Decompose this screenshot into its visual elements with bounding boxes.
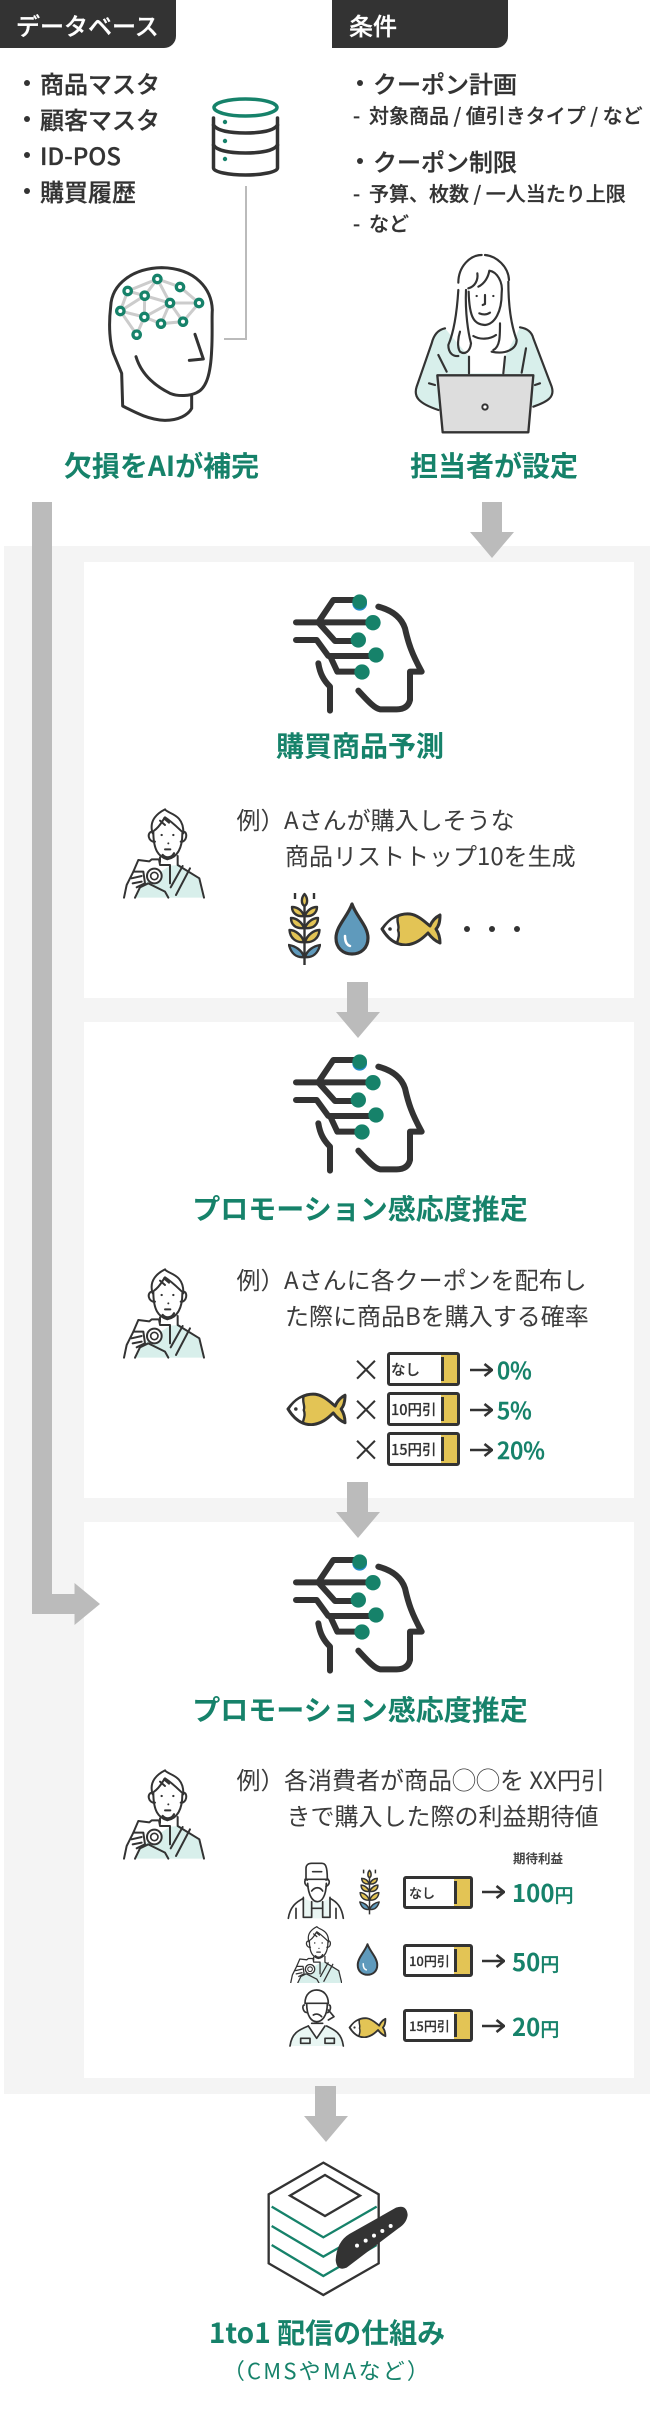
example text: きで購入した際の利益期待値 (286, 1797, 598, 1832)
icon: AI head (293, 594, 425, 714)
panel title: プロモーション感応度推定 (192, 1689, 528, 1729)
heading: 1to1 delivery system: 1to1 配信の仕組み (209, 2312, 445, 2352)
example text (236, 801, 576, 872)
icon: AI head (293, 1054, 425, 1174)
panel title: 購買商品予測 (276, 725, 444, 765)
arrow: process to delivery (304, 2086, 348, 2142)
illustration: consumers (288, 1862, 344, 2047)
example text: Aさんが購入しそうな (284, 801, 515, 836)
coupon row: 10 yen off: × (351, 1386, 381, 1430)
example text: 例） (236, 1761, 284, 1796)
coupon row: 15 yen off (351, 1426, 545, 1470)
coupon row: 15 yen off: 15円引 (391, 1438, 437, 1460)
coupon row: none (351, 1346, 532, 1390)
row: 10 yen off, 50 yen (403, 1943, 559, 1978)
coupon row: 10 yen off: 10円引 (391, 1398, 437, 1420)
icon: man with camera (123, 808, 205, 899)
connector line from database to head (224, 186, 247, 340)
example text (236, 1261, 589, 1332)
coupon row: 15 yen off: 20% (497, 1432, 545, 1466)
person: worker with cap (290, 1990, 343, 2046)
row: no coupon, 100 yen (403, 1874, 574, 1909)
row: no coupon, 100 yen: なし (409, 1883, 435, 1902)
coupon row: 10 yen off (351, 1386, 532, 1430)
icon: fish (348, 2017, 386, 2038)
example text: 例） (236, 1261, 284, 1296)
coupon row: none: なし (391, 1358, 420, 1380)
example text: 商品リストトップ10を生成 (285, 837, 576, 872)
icon: delivery cube with tag (150, 2100, 500, 2418)
list: conditions: など (369, 208, 409, 237)
panel: promotion sensitivity estimate (purchase probability) (84, 1022, 634, 1498)
list: conditions: 対象商品 / 値引きタイプ / など (369, 100, 643, 129)
heading: missing data completed by AI: 欠損をAIが補完 (64, 445, 259, 485)
heading tab: database (0, 0, 176, 48)
coupon row: none: × (351, 1346, 381, 1390)
panel title: プロモーション感応度推定 (192, 1188, 528, 1228)
label: expected profit: 期待利益 (513, 1848, 563, 1867)
icon: water drop (356, 1943, 378, 1976)
list: database items: 商品マスタ (40, 65, 160, 100)
sub item: limit details (353, 178, 626, 207)
heading tab: conditions: 条件 (349, 7, 397, 42)
row: no coupon, 100 yen: 100円 (512, 1874, 574, 1909)
list: database items (24, 65, 160, 208)
coupon row: 15 yen off: × (351, 1426, 381, 1470)
sub item: plan details (353, 100, 643, 129)
icon: wheat (288, 892, 321, 965)
example text: 各消費者が商品◯◯を XX円引 (284, 1761, 605, 1796)
ellipsis dots (464, 926, 520, 932)
row: 15 yen off, 20 yen (403, 2008, 559, 2043)
heading tab: database: データベース (16, 7, 159, 42)
heading tab: conditions (332, 0, 508, 48)
icon: woman with laptop (414, 254, 554, 434)
list: database items: 購買履歴 (40, 173, 136, 208)
list: conditions: 予算、枚数 / 一人当たり上限 (369, 178, 626, 207)
item: coupon limits: クーポン制限 (373, 143, 517, 178)
sub item: limit details: - (353, 178, 360, 207)
panel: gray process background (4, 546, 650, 2094)
sub item: plan details: - (353, 100, 360, 129)
person: older man with towel (288, 1863, 343, 1918)
example text: 例） (236, 801, 284, 836)
arrow: conditions to panel (470, 502, 514, 558)
icon: man with camera (123, 1769, 205, 1860)
list: database items: ID-POS (40, 137, 121, 172)
list: database items: 顧客マスタ (40, 101, 160, 136)
arrow: from database down and into third panel (32, 502, 100, 1625)
coupon row: 10 yen off: 5% (497, 1392, 532, 1426)
example text: Aさんに各クーポンを配布し (284, 1261, 587, 1296)
person: man with camera, small (290, 1926, 342, 1983)
subheading: CMS, MA etc: （CMSやMAなど） (223, 2354, 431, 2386)
example text (236, 1761, 605, 1832)
coupon row: none: 0% (497, 1352, 532, 1386)
row: 15 yen off, 20 yen: 20円 (512, 2008, 559, 2043)
icon: man with camera (123, 1268, 205, 1359)
arrow: panel 2 to panel 3 (336, 1482, 380, 1538)
icon: water drop (334, 902, 370, 956)
icon: AI head (293, 1554, 425, 1674)
arrow: panel 1 to panel 2 (336, 982, 380, 1038)
sub item: others: - (353, 208, 360, 237)
row: 10 yen off, 50 yen: 10円引 (409, 1951, 450, 1970)
sub item: others (353, 208, 409, 237)
panel: promotion sensitivity estimate (expected profit) (84, 1522, 634, 2078)
icon: database cylinder (212, 97, 280, 177)
icon: wheat (359, 1870, 380, 1914)
panel: purchase prediction (84, 562, 634, 998)
row: 15 yen off, 20 yen: 15円引 (409, 2016, 450, 2035)
item: coupon plan: クーポン計画 (373, 65, 517, 100)
heading: set by person in charge: 担当者が設定 (410, 445, 578, 485)
icon: fish (380, 912, 442, 946)
list: conditions (353, 65, 643, 237)
icon: fish (286, 1392, 346, 1426)
icon: head with neural network (108, 266, 214, 422)
row: 10 yen off, 50 yen: 50円 (512, 1943, 559, 1978)
example text: た際に商品Bを購入する確率 (285, 1297, 589, 1332)
